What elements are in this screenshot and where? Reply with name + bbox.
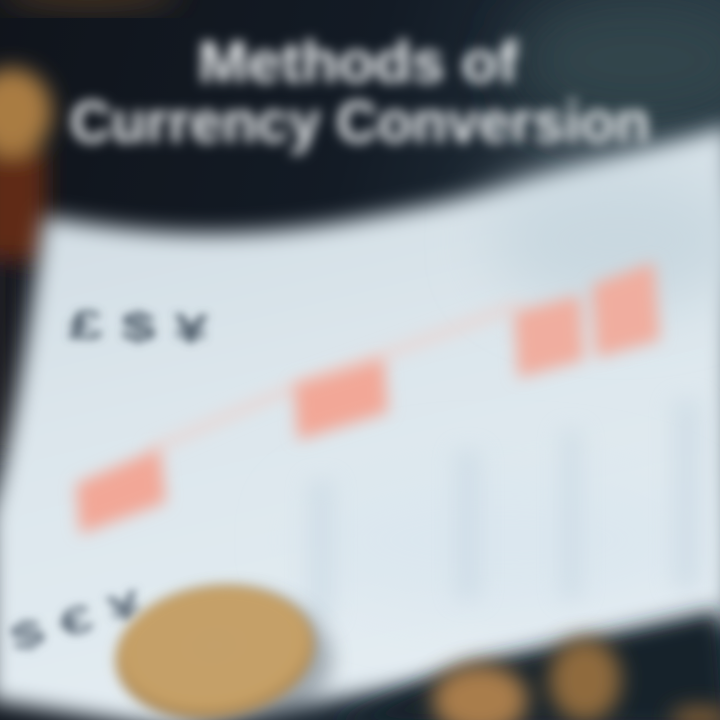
chart: faint rising trend line <box>150 305 520 450</box>
paper shading <box>300 170 720 610</box>
label: upper left text on sheet: £ $ ¥ <box>68 303 210 352</box>
bar 1 <box>76 448 166 534</box>
bar 2 <box>294 358 388 440</box>
bar 4 <box>592 262 660 358</box>
dark table foreground bottom right <box>330 610 720 720</box>
icon: large gold coin <box>107 573 332 720</box>
chart: blurred columns on the sheet <box>308 400 702 620</box>
title: Currency Conversion <box>70 90 650 155</box>
label: lower left text on sheet: $ € ¥ <box>5 583 147 661</box>
icon: stacked coins at left edge <box>0 68 52 455</box>
chart: salmon highlight bars <box>76 262 660 534</box>
icon: small coins bottom right <box>432 638 720 720</box>
title <box>70 30 650 155</box>
bar 3 <box>514 295 584 378</box>
title: Methods of <box>198 30 519 95</box>
